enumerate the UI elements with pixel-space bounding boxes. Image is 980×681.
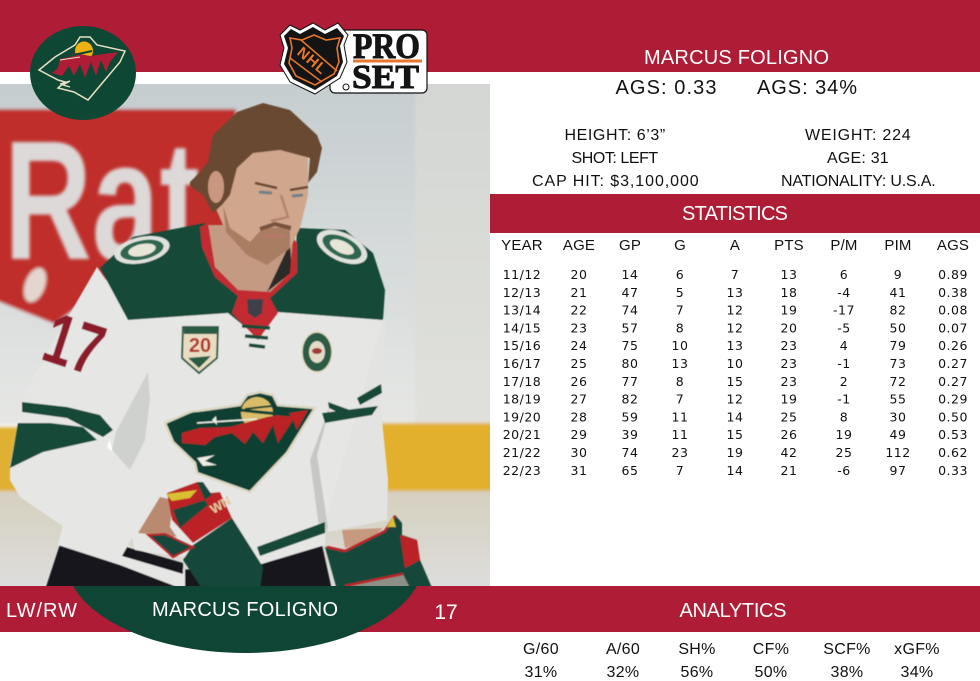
chest crest xyxy=(165,392,315,492)
bio right column: NATIONALITY: U.S.A. xyxy=(781,173,936,190)
table rows: 74 xyxy=(622,445,638,460)
table rows: 23 xyxy=(781,338,797,353)
table rows: 72 xyxy=(890,374,906,389)
table rows: 82 xyxy=(890,303,906,318)
table rows: 65 xyxy=(622,463,638,478)
table rows: 24 xyxy=(571,338,587,353)
right glove xyxy=(325,515,433,590)
table rows: 55 xyxy=(890,392,906,407)
table rows: 74 xyxy=(622,303,638,318)
shoulder patch left center xyxy=(127,242,157,258)
neck laces xyxy=(242,326,270,347)
table rows: 73 xyxy=(890,356,906,371)
table header: AGS xyxy=(937,237,969,254)
inner collar shadow xyxy=(267,243,292,292)
table rows: 112 xyxy=(885,445,911,460)
table rows: 39 xyxy=(622,427,638,442)
sleeve shading xyxy=(112,372,150,470)
table rows: 20/21 xyxy=(503,427,541,442)
lower jersey stripe xyxy=(257,522,325,556)
shoulder patch right xyxy=(316,229,368,265)
table rows: 7 xyxy=(676,463,684,478)
table rows: 20 xyxy=(781,320,797,335)
table rows: 0.62 xyxy=(938,445,968,460)
table rows: 25 xyxy=(836,445,852,460)
table rows: -1 xyxy=(837,356,851,371)
table rows: 23 xyxy=(571,320,587,335)
mouth xyxy=(263,235,285,237)
AGS percentile: AGS: 34% xyxy=(757,77,857,99)
table rows: 14/15 xyxy=(503,320,541,335)
table rows: 77 xyxy=(622,374,638,389)
20th anniversary patch: 20 xyxy=(189,335,211,357)
table rows: -4 xyxy=(837,285,851,300)
table rows: 16/17 xyxy=(503,356,541,371)
beard xyxy=(223,205,290,265)
green yoke xyxy=(100,223,385,335)
shield upper band xyxy=(301,40,337,71)
table rows: 13 xyxy=(672,356,688,371)
table header: GP xyxy=(619,237,641,254)
sign lettering: Rat xyxy=(4,106,200,296)
analytics heading: ANALYTICS xyxy=(680,600,786,622)
bio right column xyxy=(781,127,936,190)
table rows: 49 xyxy=(890,427,906,442)
shield inner xyxy=(284,27,344,90)
table rows: -17 xyxy=(833,303,855,318)
table header: G xyxy=(674,237,686,254)
table rows: 7 xyxy=(676,392,684,407)
table rows: 8 xyxy=(840,409,848,424)
table rows: 80 xyxy=(622,356,638,371)
table rows: 23 xyxy=(781,356,797,371)
analytics metrics: CF% xyxy=(753,641,789,658)
bio right column: WEIGHT: 224 xyxy=(805,127,911,144)
table rows: 13/14 xyxy=(503,303,541,318)
left hem stripe xyxy=(122,547,183,574)
shield orange outline xyxy=(289,35,340,85)
analytics metrics: 32% xyxy=(607,664,639,681)
AGS score: AGS: 0.33 xyxy=(616,77,716,99)
moustache xyxy=(260,224,291,229)
table rows: 42 xyxy=(781,445,797,460)
registered mark xyxy=(343,84,349,90)
table rows: 15 xyxy=(727,427,743,442)
table rows: 6 xyxy=(840,267,848,282)
table rows: 97 xyxy=(890,463,906,478)
table rows: 75 xyxy=(622,338,638,353)
table rows: -5 xyxy=(837,320,851,335)
table rows: 0.89 xyxy=(938,267,968,282)
table rows: 0.50 xyxy=(938,409,968,424)
table rows: 26 xyxy=(781,427,797,442)
table rows: 2 xyxy=(840,374,848,389)
table rows: 7 xyxy=(676,303,684,318)
right arm stripes xyxy=(322,384,382,423)
table rows: 19 xyxy=(727,445,743,460)
bio left column: CAP HIT: $3,100,000 xyxy=(532,173,699,190)
table rows: 9 xyxy=(894,267,902,282)
brows xyxy=(255,183,308,190)
table rows: 0.27 xyxy=(938,356,968,371)
table rows: 11/12 xyxy=(503,267,541,282)
analytics metrics xyxy=(523,641,940,681)
table rows: 0.33 xyxy=(938,463,968,478)
NHL Pro Set logo xyxy=(280,23,427,96)
table rows: 21 xyxy=(571,285,587,300)
right sleeve xyxy=(317,290,388,532)
table header xyxy=(501,237,969,254)
table rows: 47 xyxy=(622,285,638,300)
collar NHL crest xyxy=(247,299,263,318)
statistics banner xyxy=(490,194,980,233)
table rows: 10 xyxy=(672,338,688,353)
table header: A xyxy=(730,237,740,254)
table rows: 15 xyxy=(727,374,743,389)
shield outer xyxy=(280,23,348,94)
nameplate player name: MARCUS FOLIGNO xyxy=(152,599,338,621)
left arm stripes xyxy=(22,402,113,437)
hand xyxy=(138,497,177,537)
table rows: 4 xyxy=(840,338,848,353)
table rows: 13 xyxy=(727,285,743,300)
table rows: 12 xyxy=(727,392,743,407)
table rows: 31 xyxy=(571,463,587,478)
table rows: 12 xyxy=(727,320,743,335)
table rows: 0.26 xyxy=(938,338,968,353)
bio left column: SHOT: LEFT xyxy=(572,150,658,167)
table rows: 27 xyxy=(571,392,587,407)
table rows: 13 xyxy=(727,338,743,353)
20th anniversary patch xyxy=(182,327,218,373)
table rows: 0.38 xyxy=(938,285,968,300)
red collar xyxy=(200,223,297,340)
analytics metrics: SCF% xyxy=(823,641,871,658)
table rows: -1 xyxy=(837,392,851,407)
table rows: 19/20 xyxy=(503,409,541,424)
shoulder patch right center xyxy=(329,238,355,256)
table rows: 15/16 xyxy=(503,338,541,353)
table rows: 29 xyxy=(571,427,587,442)
analytics metrics: G/60 xyxy=(523,641,559,658)
table rows: 7 xyxy=(731,267,739,282)
hair xyxy=(190,103,322,213)
white label xyxy=(330,30,427,93)
table rows: 0.53 xyxy=(938,427,968,442)
table rows: 14 xyxy=(727,463,743,478)
eyes xyxy=(259,192,303,196)
table rows: 19 xyxy=(781,392,797,407)
table rows: 10 xyxy=(727,356,743,371)
left glove: WN xyxy=(207,493,234,517)
table rows: 8 xyxy=(676,374,684,389)
table rows: 19 xyxy=(836,427,852,442)
table header: AGE xyxy=(563,237,595,254)
shoulder patch right ring xyxy=(322,234,362,260)
table header: YEAR xyxy=(501,237,543,254)
position label: LW/RW xyxy=(6,600,77,622)
table rows: 0.08 xyxy=(938,303,968,318)
table rows: 0.27 xyxy=(938,374,968,389)
sleeve number 17: 17 xyxy=(34,298,114,392)
table header: PTS xyxy=(774,237,804,254)
statistics table xyxy=(501,237,969,478)
statistics banner: STATISTICS xyxy=(682,203,788,225)
analytics metrics: 38% xyxy=(831,664,863,681)
table rows: 17/18 xyxy=(503,374,541,389)
analytics metrics: 34% xyxy=(901,664,933,681)
analytics metrics: 31% xyxy=(525,664,557,681)
analytics metrics: A/60 xyxy=(606,641,640,658)
table rows: 0.29 xyxy=(938,392,968,407)
table rows: 18 xyxy=(781,285,797,300)
green nameplate arc xyxy=(66,467,424,653)
bio left column: HEIGHT: 6’3” xyxy=(564,127,666,144)
bio right column: AGE: 31 xyxy=(827,150,889,167)
table rows: 28 xyxy=(571,409,587,424)
table rows: 22 xyxy=(571,303,587,318)
table rows: 19 xyxy=(781,303,797,318)
table rows: 11 xyxy=(672,427,688,442)
dark pants xyxy=(46,545,332,586)
left sleeve xyxy=(9,266,132,545)
analytics metrics: xGF% xyxy=(894,641,940,658)
table rows: 13 xyxy=(781,267,797,282)
table rows: 57 xyxy=(622,320,638,335)
table rows: 25 xyxy=(571,356,587,371)
table rows: 30 xyxy=(890,409,906,424)
shield lower band xyxy=(290,58,322,82)
bottom red band xyxy=(0,586,980,632)
SET: SET xyxy=(352,59,419,96)
table rows: 6 xyxy=(676,267,684,282)
table rows: 59 xyxy=(622,409,638,424)
player figure xyxy=(10,103,433,590)
NHL text: NHL xyxy=(294,44,330,79)
table rows: 20 xyxy=(571,267,587,282)
torso xyxy=(106,280,345,565)
table rows: 82 xyxy=(622,392,638,407)
table rows: 14 xyxy=(727,409,743,424)
table rows xyxy=(503,267,968,478)
table rows: -6 xyxy=(837,463,851,478)
table rows: 22/23 xyxy=(503,463,541,478)
table rows: 8 xyxy=(676,320,684,335)
badge circle xyxy=(30,26,136,120)
table rows: 12/13 xyxy=(503,285,541,300)
rink background xyxy=(0,80,495,591)
table rows: 30 xyxy=(571,445,587,460)
right forearm xyxy=(342,528,383,548)
table rows: 21/22 xyxy=(503,445,541,460)
analytics metrics: 56% xyxy=(681,664,713,681)
table rows: 11 xyxy=(672,409,688,424)
table rows: 21 xyxy=(781,463,797,478)
table rows: 41 xyxy=(890,285,906,300)
table rows: 0.07 xyxy=(938,320,968,335)
table rows: 79 xyxy=(890,338,906,353)
table rows: 12 xyxy=(727,303,743,318)
table rows: 14 xyxy=(622,267,638,282)
top red banner xyxy=(0,0,980,72)
bio left column xyxy=(532,127,699,190)
face xyxy=(216,150,308,250)
table rows: 25 xyxy=(781,409,797,424)
orange divider xyxy=(353,60,422,62)
table rows: 5 xyxy=(676,285,684,300)
analytics metrics: SH% xyxy=(678,641,716,658)
nose xyxy=(271,195,288,221)
table rows: 18/19 xyxy=(503,392,541,407)
table rows: 23 xyxy=(781,374,797,389)
table header: P/M xyxy=(830,237,858,254)
round patch xyxy=(302,332,332,372)
shoulder patch left ring xyxy=(120,239,164,261)
player name heading: MARCUS FOLIGNO xyxy=(644,47,829,69)
left glove xyxy=(148,482,263,590)
player photo xyxy=(0,80,495,591)
ear xyxy=(208,171,224,203)
table rows: 50 xyxy=(890,320,906,335)
shoulder patch left xyxy=(114,235,170,265)
table header: PIM xyxy=(884,237,912,254)
jersey number: 17 xyxy=(434,601,458,624)
hem bands xyxy=(58,525,185,590)
analytics metrics: 50% xyxy=(755,664,787,681)
team logo badge xyxy=(30,26,136,120)
PRO: PRO xyxy=(353,26,420,66)
table rows: 23 xyxy=(672,445,688,460)
neck xyxy=(208,225,296,295)
wild logo xyxy=(39,37,125,100)
table rows: 26 xyxy=(571,374,587,389)
torso side shadow xyxy=(310,408,330,532)
